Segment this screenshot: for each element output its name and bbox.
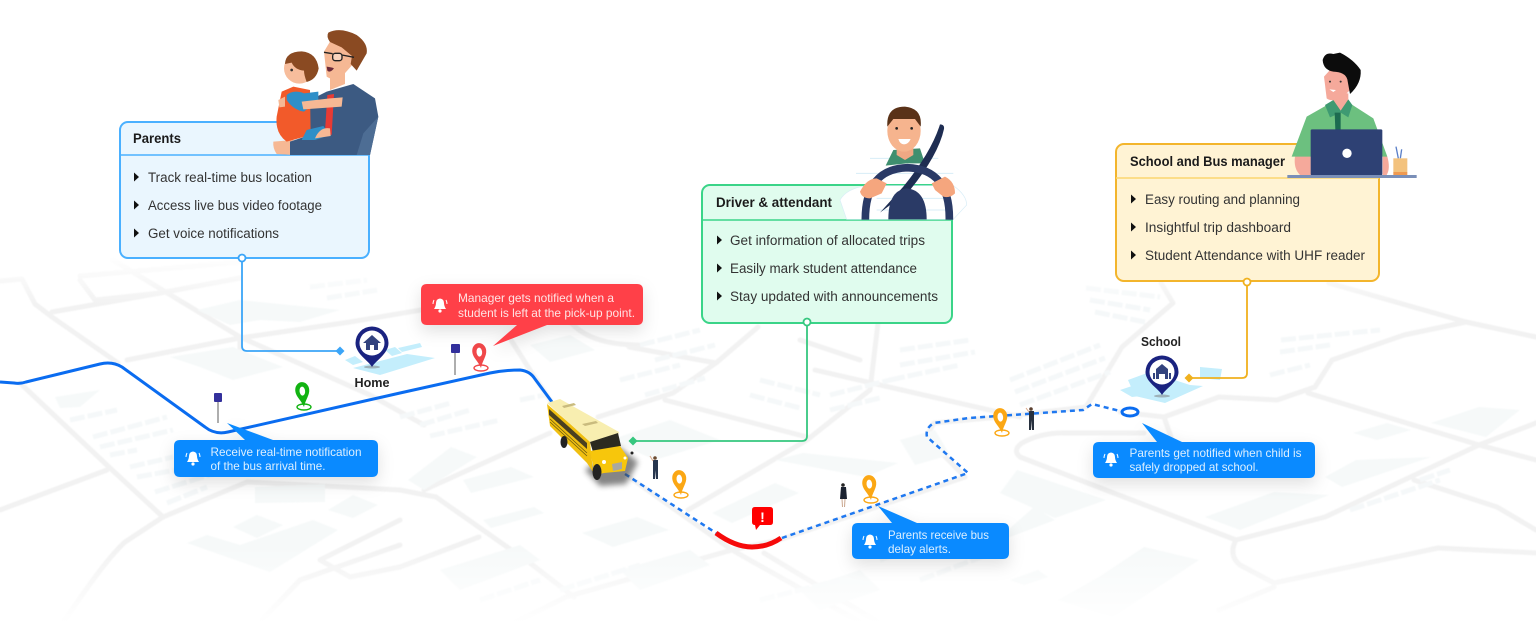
school label: School bbox=[1141, 334, 1181, 349]
callout: bus arrival time bbox=[174, 423, 378, 477]
marker: home bbox=[354, 327, 390, 390]
panel: school and bus manager bbox=[1116, 144, 1379, 281]
icon: bus stop sign, west bbox=[214, 393, 222, 423]
parents list: Track real-time bus location bbox=[148, 170, 312, 185]
callout: student left at pick-up point: student is left at the pick-up point. bbox=[458, 306, 635, 320]
callout: safe drop at school: Parents get notified when child is bbox=[1130, 446, 1302, 460]
driver list: Get information of allocated trips bbox=[730, 233, 925, 248]
connector node: parents bbox=[238, 254, 246, 262]
manager list: Easy routing and planning bbox=[1145, 192, 1300, 207]
parents list bbox=[134, 170, 322, 241]
solid route travelled bbox=[0, 363, 552, 433]
connector: manager to school bbox=[1184, 282, 1247, 382]
school building footprint bbox=[1120, 367, 1222, 403]
icon: bell bbox=[1104, 452, 1118, 467]
route end marker bbox=[1122, 408, 1138, 416]
delay alert icon bbox=[752, 507, 773, 530]
callout: safe drop at school bbox=[1093, 423, 1315, 478]
panel: driver and attendant bbox=[702, 185, 952, 323]
manager list: Student Attendance with UHF reader bbox=[1145, 248, 1365, 263]
illustration: driver at steering wheel bbox=[840, 107, 967, 220]
figure: student at school bbox=[1026, 407, 1034, 430]
illustration: parent holding child bbox=[273, 30, 378, 155]
callout: bus arrival time: of the bus arrival time. bbox=[210, 459, 326, 473]
home label: Home bbox=[354, 375, 390, 390]
driver list bbox=[717, 233, 938, 304]
manager list: Insightful trip dashboard bbox=[1145, 220, 1291, 235]
delay section of route bbox=[716, 533, 781, 547]
callout: safe drop at school: safely dropped at school. bbox=[1130, 460, 1258, 474]
marker: school bbox=[1141, 334, 1181, 398]
callout: student left at pick-up point bbox=[421, 284, 643, 346]
icon: green stop pin bbox=[294, 381, 311, 410]
figure: waiting student bbox=[840, 483, 847, 507]
callout: bus delay alerts bbox=[852, 506, 1009, 559]
icon: bell bbox=[186, 452, 200, 466]
parents heading: Parents bbox=[133, 131, 181, 146]
icon: bell bbox=[433, 298, 447, 313]
connector: driver to bus bbox=[628, 323, 807, 446]
connector: parents to home bbox=[242, 258, 344, 356]
parents list: Get voice notifications bbox=[148, 226, 279, 241]
icon: orange stop pin 3 bbox=[992, 407, 1009, 436]
manager heading: School and Bus manager bbox=[1130, 154, 1286, 169]
callout: student left at pick-up point: Manager gets notified when a bbox=[458, 291, 614, 305]
connector node: driver bbox=[804, 318, 810, 326]
callout: bus delay alerts: delay alerts. bbox=[888, 542, 951, 556]
background street map bbox=[0, 255, 1536, 634]
driver heading: Driver & attendant bbox=[716, 195, 832, 210]
delay alert icon: ! bbox=[760, 509, 765, 525]
driver list: Stay updated with announcements bbox=[730, 289, 938, 304]
connector node: manager bbox=[1244, 278, 1250, 286]
icon: bell bbox=[863, 534, 877, 549]
icon: bus stop sign, east bbox=[451, 344, 460, 375]
parents list: Access live bus video footage bbox=[148, 198, 322, 213]
icon: orange stop pin 1 bbox=[671, 469, 688, 498]
figure: student boarding bbox=[650, 456, 658, 479]
icon: orange stop pin 2 bbox=[861, 474, 878, 503]
panel: parents bbox=[120, 122, 369, 258]
callout: bus arrival time: Receive real-time notification bbox=[210, 445, 362, 459]
illustration: manager at laptop bbox=[1287, 53, 1417, 178]
school bus bbox=[547, 399, 638, 486]
home building footprint bbox=[345, 343, 435, 375]
dashed route ahead bbox=[625, 404, 1120, 538]
manager list bbox=[1131, 192, 1365, 263]
callout: bus delay alerts: Parents receive bus bbox=[888, 528, 989, 542]
driver list: Easily mark student attendance bbox=[730, 261, 917, 276]
icon: red stop pin bbox=[471, 342, 488, 371]
